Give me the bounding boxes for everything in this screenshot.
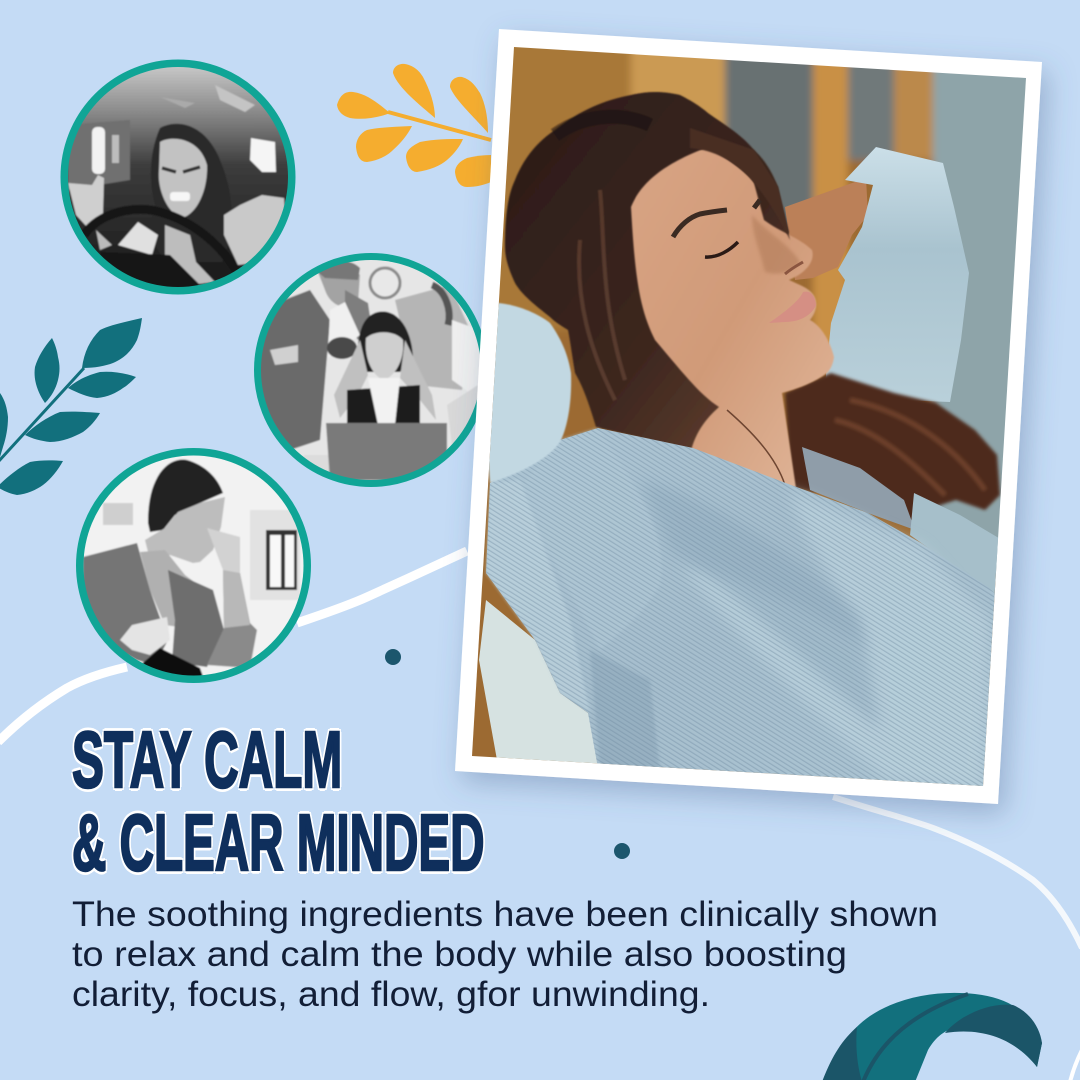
chair xyxy=(479,600,605,770)
closed eye xyxy=(705,242,738,257)
raised right sleeve xyxy=(825,147,969,402)
decorative dot lower xyxy=(614,843,630,859)
main photo: relaxed woman xyxy=(460,30,1043,800)
necklace xyxy=(727,410,785,485)
photo circle: tired woman pinching nose xyxy=(80,450,310,682)
white curve bottom right corner xyxy=(1070,1050,1080,1080)
face and neck xyxy=(631,147,834,495)
white swoosh lower right xyxy=(833,797,1080,948)
title: stay calm and clear minded: STAY CALM xyxy=(72,715,342,804)
nostril xyxy=(785,262,803,274)
white swoosh upper xyxy=(0,551,467,742)
title: stay calm and clear minded: & CLEAR MINDED xyxy=(72,798,485,887)
icon: yellow leaf branch xyxy=(337,64,491,187)
photo background xyxy=(460,30,1043,800)
hair xyxy=(505,92,789,450)
right shoulder piece xyxy=(910,493,1002,600)
left raised cuff xyxy=(484,303,571,483)
nose shadow xyxy=(752,215,800,274)
decorative dot upper xyxy=(385,649,401,665)
photo circle: angry driver xyxy=(60,60,300,295)
body paragraph xyxy=(72,895,938,1014)
eyebrow xyxy=(673,200,760,237)
photo circle: stressed office worker xyxy=(255,255,485,485)
body paragraph: The soothing ingredients have been clinically shown xyxy=(72,895,938,934)
title: stay calm and clear minded xyxy=(71,715,485,887)
flowing hair right xyxy=(785,373,1000,530)
icon: large teal leaf xyxy=(822,993,1042,1080)
body paragraph: to relax and calm the body while also boosting xyxy=(72,935,847,974)
body paragraph: clarity, focus, and flow, gfor unwinding. xyxy=(72,975,710,1014)
shirt body xyxy=(486,428,1002,795)
hair strand over temple xyxy=(690,128,790,240)
grey collar xyxy=(802,447,915,530)
lips xyxy=(769,292,816,323)
forearm behind head xyxy=(785,178,868,280)
icon: teal leaf branch xyxy=(0,318,142,495)
photo frame xyxy=(455,29,1043,804)
